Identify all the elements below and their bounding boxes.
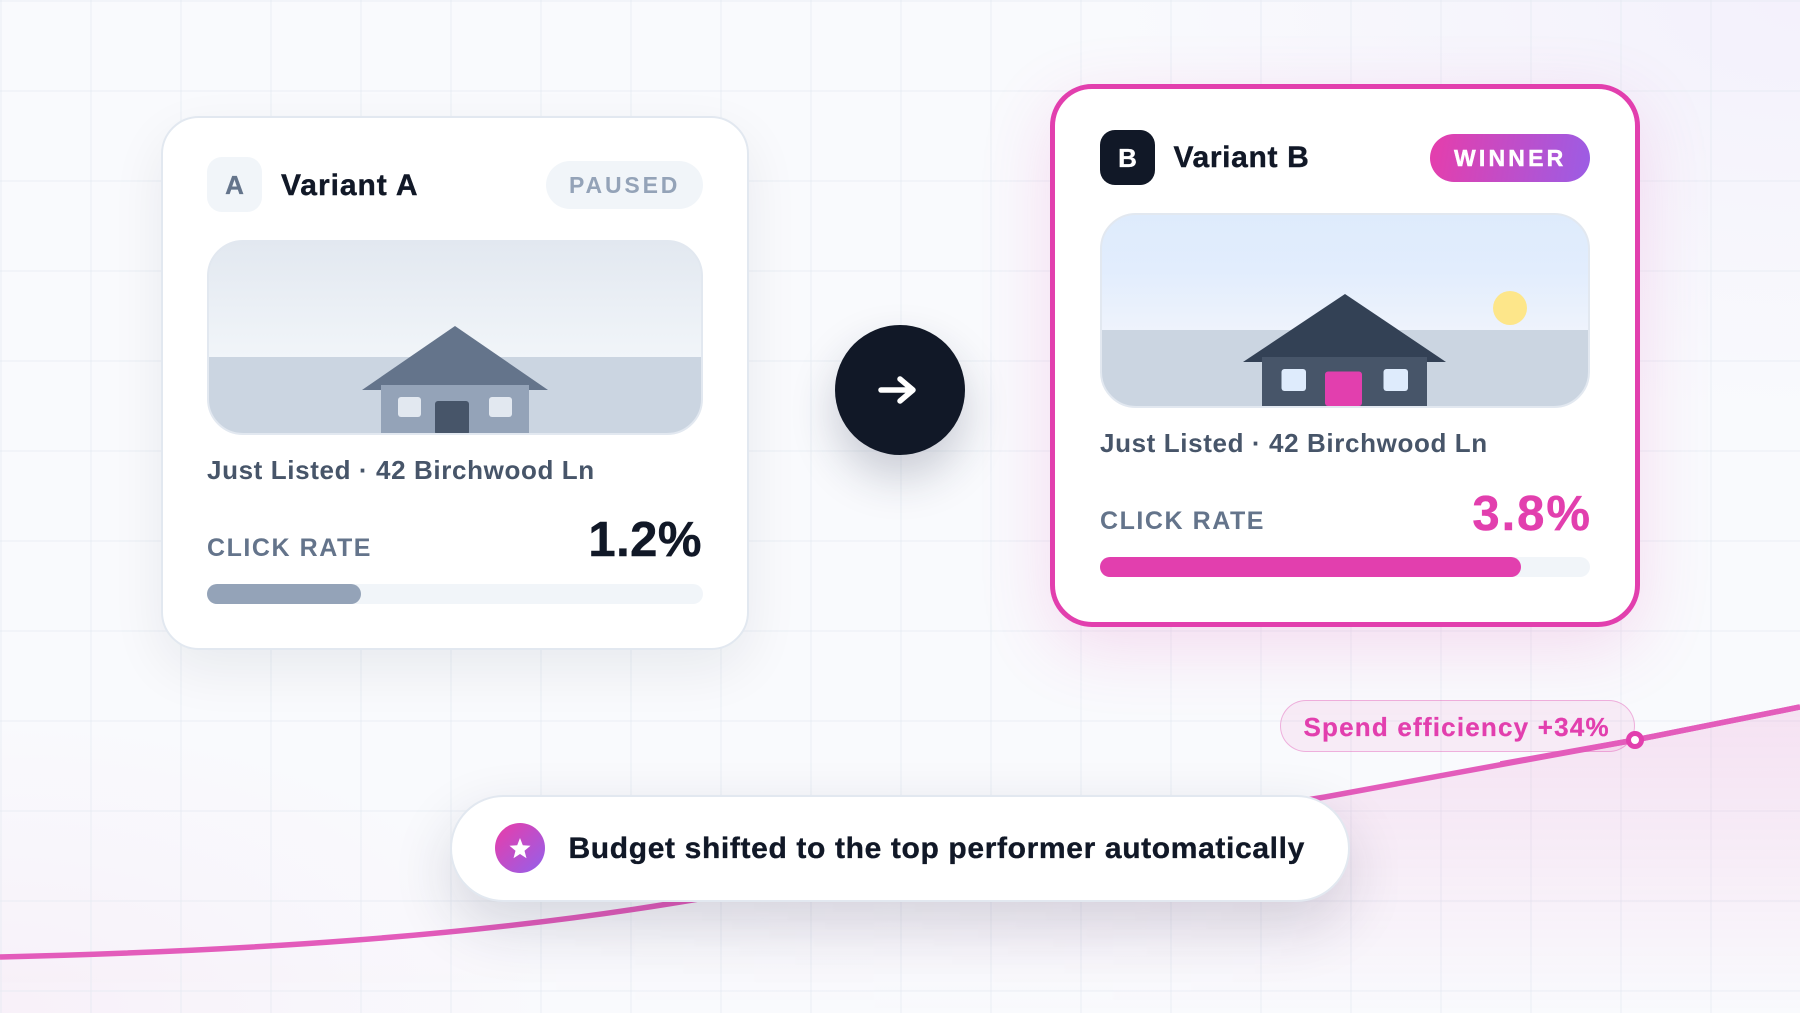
badge letter A: A <box>225 170 244 200</box>
icon: star badge <box>495 823 545 873</box>
door <box>435 401 469 435</box>
click rate value: 1.2% <box>588 512 702 566</box>
progress track <box>207 584 703 604</box>
badge letter B: B <box>1118 143 1137 173</box>
walls <box>381 390 529 433</box>
variant A title: Variant A <box>281 168 418 202</box>
click rate label: CLICK RATE <box>1100 507 1265 535</box>
roof <box>362 326 548 390</box>
paused label: PAUSED <box>569 172 680 198</box>
windows <box>398 397 421 417</box>
callout text: Spend efficiency +34% <box>1304 712 1610 742</box>
progress fill <box>207 584 361 604</box>
winner pill <box>1430 134 1590 182</box>
progress track <box>1100 557 1590 577</box>
listing caption: Just Listed · 42 Birchwood Ln <box>1100 428 1488 458</box>
ad image: muted house <box>207 240 703 435</box>
winner label: WINNER <box>1454 145 1566 171</box>
callout: spend efficiency <box>1280 700 1635 752</box>
arrow button <box>835 325 965 455</box>
ad image: vivid house <box>1100 213 1590 408</box>
performance chart <box>0 704 1800 960</box>
click rate value: 3.8% <box>1472 486 1592 540</box>
chart line over callout <box>1500 704 1800 762</box>
variant A badge <box>207 157 262 212</box>
click rate label: CLICK RATE <box>207 534 372 562</box>
chart marker <box>1626 731 1644 749</box>
roof <box>1243 294 1446 362</box>
windows <box>1282 369 1306 391</box>
listing caption: Just Listed · 42 Birchwood Ln <box>207 455 595 485</box>
chart area <box>1314 710 1800 921</box>
door <box>1325 372 1362 406</box>
chart line <box>0 707 1800 957</box>
variant B title: Variant B <box>1174 140 1309 174</box>
icon: arrow <box>878 376 916 404</box>
paused pill <box>546 161 703 209</box>
banner text: Budget shifted to the top performer automatically <box>568 832 1305 865</box>
variant B badge <box>1100 130 1155 185</box>
progress fill <box>1100 557 1521 577</box>
banner: budget shifted <box>450 795 1350 902</box>
sun <box>1493 291 1527 325</box>
panel: variant A <box>161 116 749 650</box>
panel: variant B <box>1050 84 1640 627</box>
walls <box>1262 362 1427 406</box>
